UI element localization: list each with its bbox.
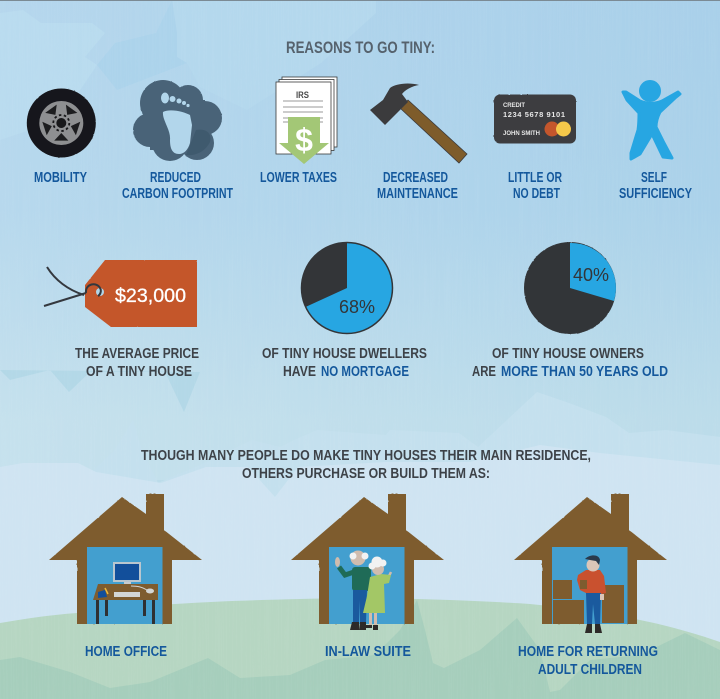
label: self sufficiency [619,170,692,202]
background: pale mountain band [0,392,720,620]
label: average price [75,346,199,380]
label: average price: OF A TINY HOUSE [86,364,192,380]
figures: elderly couple [335,550,391,630]
label: little or no debt: NO DEBT [513,186,560,202]
label: reduced carbon footprint [122,170,233,202]
label: home office: HOME OFFICE [85,644,167,660]
background: upper watermark shapes [0,0,376,140]
heading: main residence note: OTHERS PURCHASE OR BUILD THEM AS: [242,466,490,482]
label: reduced carbon footprint: CARBON FOOTPRINT [122,186,233,202]
label: home for returning adult children [518,644,658,678]
label: more than 50 years old: ARE [472,364,496,380]
label: no mortgage: HAVE [283,364,316,380]
house: home for returning adult children [514,494,667,624]
label: decreased maintenance: MAINTENANCE [377,186,458,202]
chart: 68% pie: 68% [339,297,375,317]
label: decreased maintenance [377,170,458,202]
chart: 40% pie [524,242,616,334]
icon: tire [27,88,96,158]
icon: credit card: CREDIT [503,103,525,109]
background: green hill [0,598,720,699]
heading: main residence note: THOUGH MANY PEOPLE DO MAKE TINY HOUSES THEIR MAIN RESIDENCE, [141,448,591,464]
chart: 40% pie: 40% [573,265,609,285]
label: decreased maintenance: DECREASED [383,170,448,186]
icon: credit card: 1234 5678 9101 [503,110,565,119]
icon: credit card [494,94,576,144]
figure: adult child with boxes [553,555,624,633]
heading: main residence note [141,448,591,482]
label: little or no debt: LITTLE OR [508,170,562,186]
icon: self sufficiency figure [623,82,680,159]
label: more than 50 years old: OF TINY HOUSE OWNERS [492,346,644,362]
label: home for returning adult children: ADULT CHILDREN [538,662,642,678]
label: reduced carbon footprint: REDUCED [150,170,201,186]
icon: credit card: JOHN SMITH [503,131,540,137]
label: little or no debt [508,170,562,202]
label: no mortgage: NO MORTGAGE [321,364,409,380]
label: more than 50 years old [472,346,668,380]
background: top edge [0,0,720,1]
icon: IRS papers with dollar arrow: IRS [296,90,309,100]
label: average price: THE AVERAGE PRICE [75,346,199,362]
label: in-law suite: IN-LAW SUITE [325,644,411,660]
label: more than 50 years old: MORE THAN 50 YEARS OLD [501,364,668,380]
label: no mortgage: OF TINY HOUSE DWELLERS [262,346,427,362]
label: self sufficiency: SELF [641,170,667,186]
label: self sufficiency: SUFFICIENCY [619,186,692,202]
icon: carbon footprint cloud [133,80,222,161]
background: pale sky [0,445,720,660]
house: in-law suite [291,494,444,624]
icon: IRS papers with dollar arrow: $ [295,122,313,158]
background: darker foreground mountains [0,600,720,699]
label: no mortgage [262,346,427,380]
icon: IRS papers with dollar arrow [276,77,337,164]
label: mobility: MOBILITY [34,170,87,186]
background: teal drips [0,370,200,412]
label: lower taxes: LOWER TAXES [260,170,337,186]
chart: 68% pie [301,242,392,334]
icon: price tag: $23,000 [115,286,186,307]
background: horizontal lightening [0,0,720,480]
house: home office [49,494,202,624]
label: home for returning adult children: HOME FOR RETURNING [518,644,658,660]
title: reasons to go tiny: REASONS TO GO TINY: [286,38,435,57]
icon: hammer [370,84,467,163]
icon: price tag [44,260,197,327]
